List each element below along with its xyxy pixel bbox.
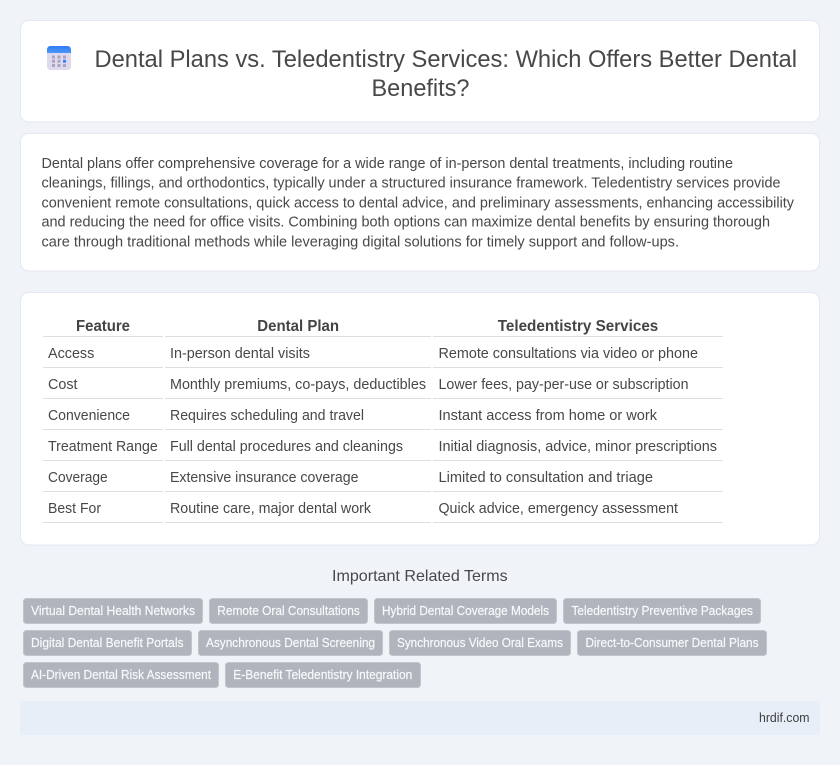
- table row: access: Remote consultations via video or phone: [438, 346, 698, 362]
- summary paragraph: convenient remote consultations, quick access to dental advice, and preliminary assessments, enhancing accessibility: [42, 196, 795, 212]
- tag: [226, 662, 420, 688]
- footer bar: hrdif.com: [759, 710, 810, 725]
- table row: coverage: Extensive insurance coverage: [170, 470, 358, 486]
- table row: cost: Lower fees, pay-per-use or subscription: [438, 377, 688, 393]
- heading: Benefits?: [372, 75, 470, 102]
- panel: comparison table: [20, 292, 820, 545]
- table row: convenience: Convenience: [48, 408, 130, 424]
- tag: AI-Driven Dental Risk Assessment: [31, 668, 211, 682]
- tag: Hybrid Dental Coverage Models: [382, 604, 549, 618]
- table header row: Dental Plan: [257, 318, 339, 335]
- summary paragraph: care through traditional methods while leveraging digital solutions for timely support and follow-ups.: [42, 234, 679, 250]
- panel: summary: [20, 134, 820, 271]
- tag: [198, 630, 382, 656]
- tag: [210, 598, 368, 624]
- table row: coverage: Coverage: [48, 470, 108, 486]
- table row: cost: [48, 377, 688, 393]
- tag: [578, 630, 766, 656]
- heading: related terms: Important Related Terms: [332, 568, 508, 585]
- table row: access: Access: [48, 346, 94, 362]
- table row: best for: Best For: [48, 501, 101, 517]
- table row: coverage: Limited to consultation and triage: [438, 470, 653, 486]
- tag: [24, 662, 218, 688]
- footer bar: [20, 701, 820, 735]
- tag: Synchronous Video Oral Exams: [397, 636, 563, 650]
- summary paragraph: [42, 156, 795, 250]
- table row: convenience: Requires scheduling and travel: [170, 408, 364, 424]
- panel: title header: [20, 20, 820, 122]
- table row: best for: [48, 501, 678, 517]
- table row: treatment range: Initial diagnosis, advice, minor prescriptions: [438, 439, 717, 455]
- table header row: Teledentistry Services: [498, 318, 659, 335]
- tag: [24, 598, 202, 624]
- tag: Virtual Dental Health Networks: [31, 604, 195, 618]
- related terms tag list: [24, 598, 766, 688]
- table row: treatment range: Full dental procedures and cleanings: [170, 439, 403, 455]
- summary paragraph: and reducing the need for office visits. Combining both options can maximize dental benefits by ensuring thorough: [42, 214, 770, 230]
- table row: best for: Quick advice, emergency assessment: [438, 501, 678, 517]
- tag: [564, 598, 760, 624]
- heading: [94, 46, 797, 102]
- table row: coverage: [48, 470, 653, 486]
- tag: Asynchronous Dental Screening: [206, 636, 375, 650]
- table row: cost: Monthly premiums, co-pays, deductibles: [170, 377, 426, 393]
- table row: convenience: Instant access from home or work: [438, 408, 658, 424]
- tag: [390, 630, 570, 656]
- tag: Remote Oral Consultations: [217, 604, 360, 618]
- tag: Direct-to-Consumer Dental Plans: [586, 636, 758, 650]
- table row: convenience: [48, 408, 658, 424]
- table header row: [76, 318, 659, 335]
- heading: Dental Plans vs. Teledentistry Services: Which Offers Better Dental: [94, 46, 797, 73]
- tag: Teledentistry Preventive Packages: [572, 604, 753, 618]
- tag: [374, 598, 556, 624]
- table header row: Feature: [76, 318, 130, 335]
- table row: access: In-person dental visits: [170, 346, 310, 362]
- table row: cost: Cost: [48, 377, 78, 393]
- tag: [24, 630, 192, 656]
- table row: treatment range: Treatment Range: [48, 439, 158, 455]
- table row: best for: Routine care, major dental work: [170, 501, 372, 517]
- tag: Digital Dental Benefit Portals: [31, 636, 184, 650]
- table row: treatment range: [48, 439, 717, 455]
- tag: E-Benefit Teledentistry Integration: [233, 668, 412, 682]
- summary paragraph: cleanings, fillings, and orthodontics, typically under a structured insurance framework. Teledentistry services provide: [42, 176, 780, 192]
- summary paragraph: Dental plans offer comprehensive coverage for a wide range of in-person dental treatments, including routine: [42, 156, 733, 172]
- table row: access: [48, 346, 698, 362]
- icon: calendar: [47, 46, 71, 70]
